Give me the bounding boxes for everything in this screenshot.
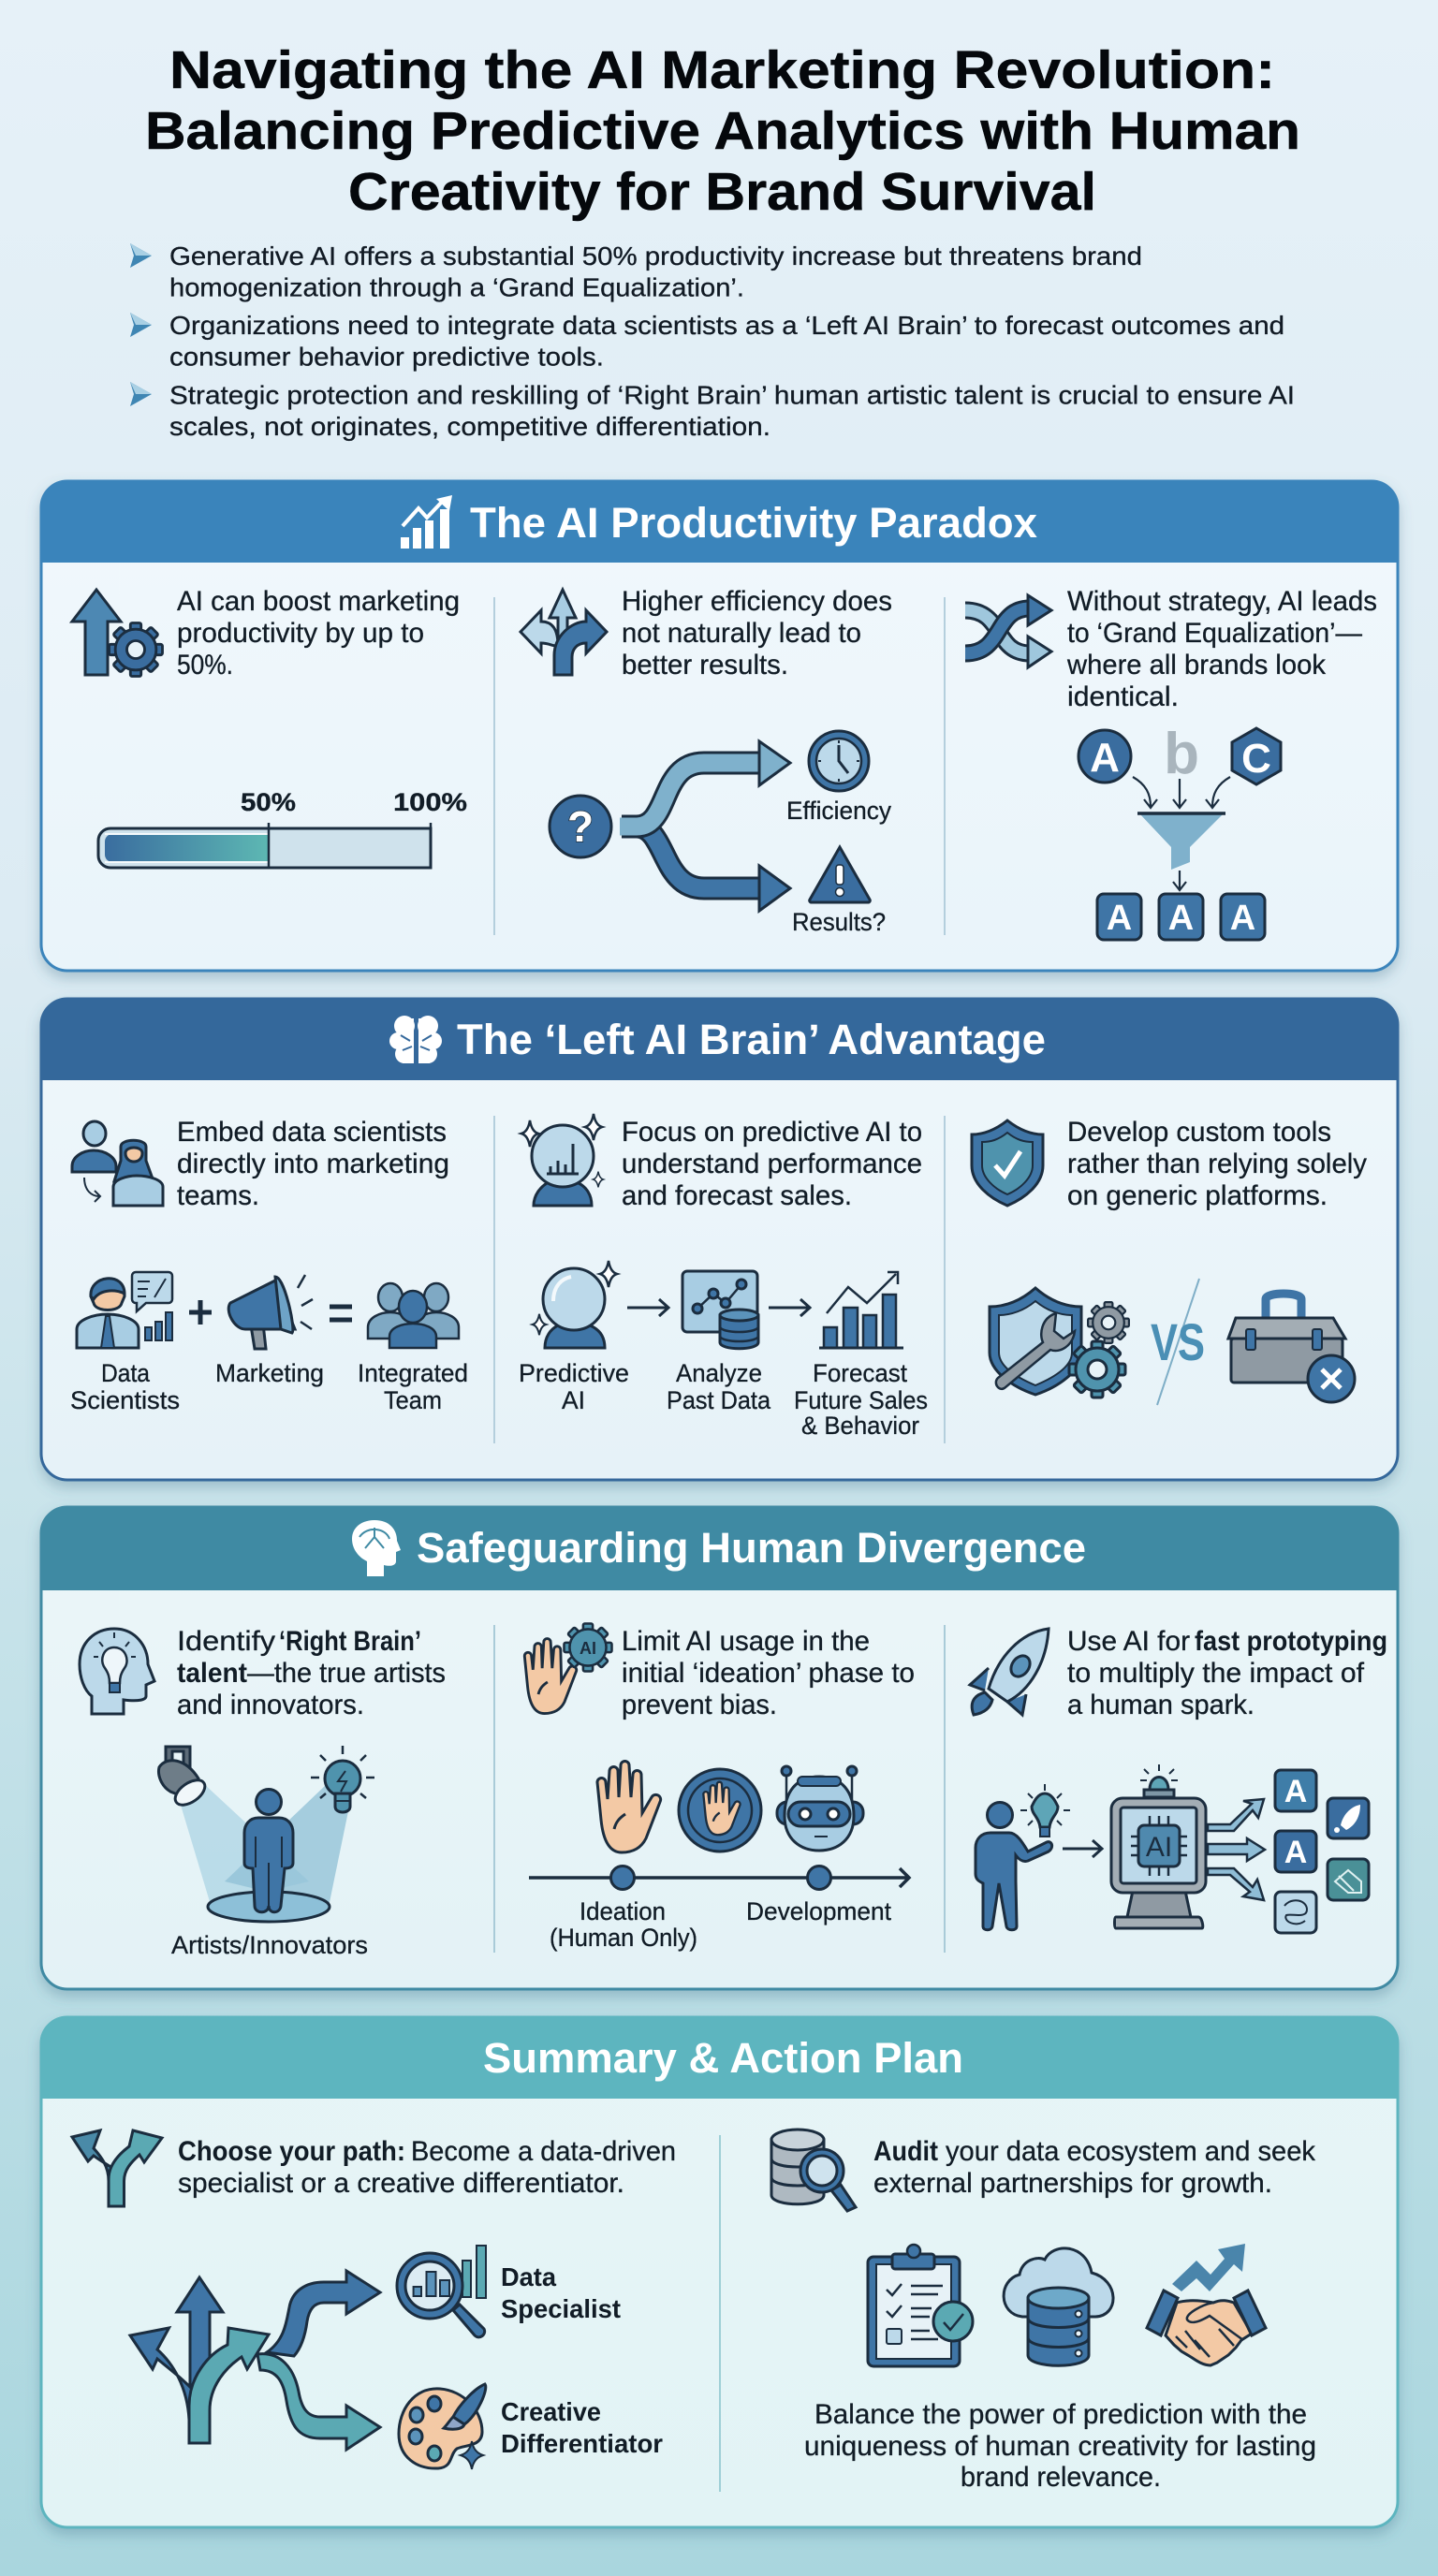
labels: Predictive	[519, 1359, 629, 1387]
text: to multiply the impact of	[1067, 1658, 1365, 1689]
icon: brand C: C	[1241, 736, 1271, 782]
heading: The ‘Left AI Brain’ Advantage	[457, 1016, 1046, 1063]
bullet 3: scales, not originates, competitive differentiation.	[169, 412, 770, 441]
icon: past data chart and database	[682, 1271, 758, 1349]
plus sign	[189, 1300, 212, 1325]
panel: The AI Productivity Paradox	[41, 481, 1398, 971]
audit and growth icons	[868, 2244, 1266, 2366]
bullet 3	[130, 380, 1295, 441]
icons: identical brand tiles: A	[1230, 899, 1255, 938]
arrow: to efficiency	[620, 741, 790, 827]
custom tools versus generic toolbox	[990, 1279, 1355, 1405]
closing statement	[804, 2399, 1316, 2493]
icon: hand and AI gear	[524, 1623, 612, 1714]
icon: generic toolbox with X	[1228, 1294, 1355, 1402]
text	[177, 1626, 446, 1720]
arrow	[769, 1299, 810, 1316]
text: directly into marketing	[177, 1149, 449, 1179]
text	[178, 2136, 676, 2199]
human spark to AI illustration	[976, 1764, 1369, 1933]
text: not naturally lead to	[622, 618, 861, 649]
text: where all brands look	[1066, 650, 1327, 681]
label: creative differentiator: Differentiator	[501, 2429, 663, 2458]
icon: database and magnifier	[771, 2130, 856, 2211]
heading: Safeguarding Human Divergence	[417, 1524, 1086, 1572]
bullet 2: Organizations need to integrate data scientists as a ‘Left AI Brain’ to forecast outcomes and	[169, 311, 1284, 340]
icons: prototype tiles: A	[1284, 1835, 1307, 1870]
arrow: data specialist path	[267, 2271, 380, 2356]
text: talent	[177, 1658, 247, 1689]
title: Navigating the AI Marketing Revolution:	[169, 40, 1275, 100]
text: AI can boost marketing	[177, 586, 460, 617]
column: limit AI in ideation	[524, 1623, 915, 1952]
text: Focus on predictive AI to	[622, 1117, 922, 1148]
icon: brain	[389, 1015, 442, 1065]
icon: AI computer	[1111, 1764, 1206, 1928]
text: productivity by up to	[177, 618, 424, 649]
text	[622, 1626, 915, 1720]
title	[145, 40, 1300, 222]
icon: AI computer: AI	[1146, 1832, 1172, 1863]
equals sign	[330, 1307, 352, 1320]
icon: question mark: ?	[567, 802, 594, 851]
text: fast prototyping	[1195, 1626, 1387, 1657]
icons: identical brand tiles: A	[1168, 899, 1194, 938]
labels: Marketing	[215, 1359, 324, 1387]
icon: brand C	[1232, 728, 1281, 784]
text: Without strategy, AI leads	[1067, 586, 1377, 617]
text: ‘Right Brain’	[279, 1626, 421, 1657]
arrows into funnel	[1133, 777, 1230, 808]
panel: Safeguarding Human Divergence	[41, 1507, 1398, 1989]
bullet 3: Strategic protection and reskilling of ‘Right Brain’ human artistic talent is crucial to ensure AI	[169, 380, 1295, 410]
icon: clock	[809, 731, 869, 791]
text	[177, 586, 460, 681]
column: predictive AI	[519, 1114, 928, 1440]
panel header	[41, 999, 1398, 1080]
icon: checklist clipboard	[868, 2245, 973, 2366]
text: understand performance	[622, 1149, 922, 1179]
text: rather than relying solely	[1067, 1149, 1367, 1179]
labels	[70, 1359, 468, 1414]
icons: prototype tiles	[1275, 1770, 1369, 1933]
label: data specialist	[501, 2262, 621, 2323]
labels: Scientists	[70, 1386, 180, 1414]
icon: shuffle arrows	[965, 595, 1051, 667]
icon: stop circle	[679, 1769, 761, 1852]
icon: growth chart	[401, 495, 452, 549]
icon: warning triangle	[810, 847, 870, 902]
column: right brain talent	[80, 1626, 446, 1959]
labels	[519, 1359, 928, 1440]
icon: hand and AI gear: AI	[580, 1639, 596, 1658]
spotlight illustration	[159, 1746, 374, 1959]
closing statement: uniqueness of human creativity for lasting	[804, 2431, 1316, 2462]
text: Higher efficiency does	[622, 586, 892, 617]
icon: cloud database	[1004, 2248, 1113, 2365]
text: teams.	[177, 1180, 259, 1211]
text: and innovators.	[177, 1690, 364, 1720]
heading: Summary & Action Plan	[483, 2034, 963, 2082]
labels	[550, 1897, 891, 1952]
icon: brand A	[1078, 730, 1131, 783]
text: Audit	[873, 2136, 938, 2167]
funnel diagram	[1078, 722, 1281, 940]
closing statement: Balance the power of prediction with the	[814, 2399, 1307, 2430]
icon: arrow and gear	[72, 590, 163, 676]
icon: spotlight lamp	[159, 1747, 209, 1810]
column: embed data scientists	[70, 1117, 468, 1414]
text: better results.	[622, 650, 788, 681]
arrow	[627, 1299, 668, 1316]
bullet 2: consumer behavior predictive tools.	[169, 343, 604, 371]
timeline illustration	[529, 1762, 909, 1952]
text: Use AI for	[1067, 1626, 1190, 1657]
labels: Past Data	[667, 1386, 771, 1414]
labels: Integrated	[358, 1359, 468, 1387]
labels: (Human Only)	[550, 1924, 697, 1952]
arrow: to results	[622, 827, 790, 911]
icon: paint palette	[399, 2384, 486, 2469]
icon: shield with wrench and gears	[990, 1288, 1129, 1398]
path diagram	[130, 2246, 663, 2469]
label: creative differentiator	[501, 2397, 663, 2458]
VS label: VS	[1151, 1312, 1205, 1371]
icon: two people	[72, 1121, 163, 1206]
progress bar 50% of 100%: 100%	[393, 788, 467, 816]
text: to ‘Grand Equalization’—	[1067, 618, 1362, 649]
panel header	[41, 481, 1398, 563]
text: Choose your path:	[178, 2136, 405, 2167]
arrow down	[1173, 871, 1186, 890]
arrows to outputs	[1208, 1799, 1265, 1900]
column: efficiency vs results	[521, 586, 892, 936]
icon: head with lightbulb	[80, 1629, 154, 1714]
text: Identify	[177, 1626, 275, 1657]
key takeaways bullet list	[130, 242, 1295, 441]
icon: shield with check	[972, 1120, 1043, 1206]
label: data specialist: Specialist	[501, 2294, 621, 2323]
progress bar 50% of 100%: 50%	[241, 788, 296, 816]
icons: identical brand tiles: A	[1107, 899, 1132, 938]
bullet 1	[130, 242, 1142, 301]
panel header	[41, 2017, 1398, 2099]
title: Creativity for Brand Survival	[348, 162, 1096, 222]
bullet 1: Generative AI offers a substantial 50% productivity increase but threatens brand	[169, 242, 1142, 271]
text: Embed data scientists	[177, 1117, 447, 1148]
labels: Future Sales	[794, 1386, 928, 1414]
icon: question mark	[550, 796, 611, 857]
equation: data scientists + marketing = integrated team	[70, 1272, 468, 1414]
column: fast prototyping	[970, 1626, 1387, 1933]
icon: megaphone	[228, 1275, 313, 1349]
icons: identical brand tiles	[1097, 894, 1265, 940]
VS label	[1151, 1279, 1205, 1405]
stage ellipse	[208, 1892, 330, 1922]
panel header	[41, 1507, 1398, 1590]
labels: Development	[746, 1897, 891, 1925]
icon: human head with brain	[352, 1520, 401, 1576]
icon: brand b: b	[1164, 722, 1199, 786]
icon: person with lightbulb	[976, 1784, 1070, 1930]
arrow	[1063, 1840, 1102, 1857]
icon: robot	[777, 1766, 863, 1851]
labels: Forecast	[813, 1359, 907, 1387]
text: your data ecosystem and seek	[946, 2136, 1316, 2167]
icon: person	[244, 1790, 293, 1912]
icon: forked arrow	[72, 2130, 162, 2206]
labels: Team	[384, 1386, 442, 1414]
icon: magnifier with bars	[397, 2246, 486, 2337]
text: on generic platforms.	[1067, 1180, 1328, 1211]
bullet 1: homogenization through a ‘Grand Equalization’.	[169, 273, 744, 301]
label: data specialist: Data	[501, 2262, 556, 2291]
labels: AI	[562, 1386, 585, 1414]
progress bar 50% of 100%	[98, 788, 467, 868]
bullet 2	[130, 311, 1284, 371]
text: —the true artists	[247, 1658, 446, 1689]
light beams	[180, 1783, 348, 1907]
icon: split arrows	[521, 590, 607, 675]
column: productivity boost	[72, 586, 467, 868]
icon: funnel	[1137, 813, 1225, 870]
icon: data scientist	[77, 1272, 172, 1348]
flow: predictive AI to forecast	[519, 1261, 928, 1440]
icon: open hand	[597, 1762, 661, 1852]
text	[1067, 1626, 1387, 1720]
text: Become a data-driven	[411, 2136, 676, 2167]
label: Artists/Innovators	[171, 1931, 368, 1959]
icon: crystal ball	[533, 1261, 617, 1348]
icon: lightbulb	[311, 1746, 374, 1812]
closing statement: brand relevance.	[961, 2462, 1161, 2493]
icon: rocket	[970, 1629, 1049, 1715]
text	[622, 586, 892, 681]
icon: three-way arrow	[130, 2277, 269, 2443]
icon: forecast bars	[819, 1272, 903, 1348]
text: Limit AI usage in the	[622, 1626, 870, 1657]
text	[1067, 1117, 1367, 1211]
column: custom tools	[972, 1117, 1367, 1405]
icon: brand A: A	[1090, 735, 1120, 781]
label: efficiency: Efficiency	[786, 797, 891, 825]
text: specialist or a creative differentiator.	[178, 2168, 624, 2199]
icon: crystal ball with chart	[521, 1114, 603, 1206]
labels: Analyze	[676, 1359, 762, 1387]
label: results: Results?	[792, 908, 886, 936]
labels: & Behavior	[801, 1412, 919, 1440]
timeline	[529, 1866, 909, 1889]
text	[622, 1117, 922, 1211]
text	[177, 1117, 449, 1211]
text: initial ‘ideation’ phase to	[622, 1658, 915, 1689]
labels: Data	[101, 1359, 151, 1387]
panel: Summary and Action Plan	[41, 2017, 1398, 2527]
text: and forecast sales.	[622, 1180, 852, 1211]
column: grand equalization	[965, 586, 1377, 940]
heading: The AI Productivity Paradox	[470, 499, 1037, 547]
text: 50%.	[177, 650, 233, 681]
icons: prototype tiles: A	[1284, 1774, 1307, 1809]
text: prevent bias.	[622, 1690, 777, 1720]
text	[873, 2136, 1316, 2199]
decision fork diagram	[550, 731, 891, 936]
labels: Ideation	[580, 1897, 666, 1925]
text: identical.	[1067, 681, 1179, 712]
title: Balancing Predictive Analytics with Human	[145, 101, 1300, 161]
panel: The Left AI Brain Advantage	[41, 999, 1398, 1480]
icon: team	[368, 1283, 459, 1348]
arrow: creative differentiator path	[257, 2354, 380, 2450]
label: creative differentiator: Creative	[501, 2397, 601, 2426]
column: audit data	[771, 2130, 1316, 2493]
column: choose your path	[72, 2130, 676, 2469]
text	[1066, 586, 1377, 712]
text: external partnerships for growth.	[873, 2168, 1272, 2199]
text: a human spark.	[1067, 1690, 1255, 1720]
text: Develop custom tools	[1067, 1117, 1331, 1148]
icon: handshake with growth arrow	[1147, 2244, 1266, 2365]
